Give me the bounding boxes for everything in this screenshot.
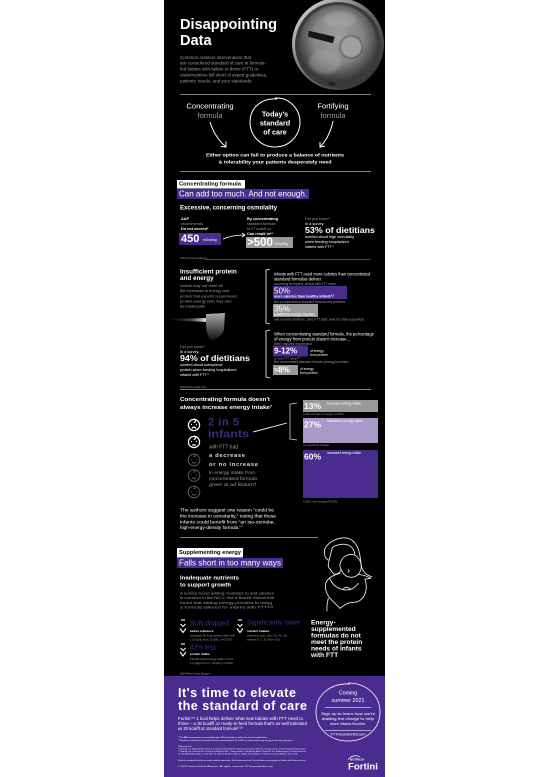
authors note: high-energy-density formula.": [180, 525, 241, 530]
bar: 27%: [303, 418, 378, 447]
panel: protein: 6,7: [298, 356, 302, 360]
callout: coming summer 2021: summer 2021: [332, 698, 364, 704]
callout: today's standard of care: Today's: [262, 110, 288, 118]
footnotes: 10. Van Waardenburg DA, et al. Clin Nutr. 11. Clarke S. Arch Dis Child. 12. Daly A, et al. Nutrients. 13. Nutricia survey of dietitians, data on file.: [178, 752, 298, 756]
panel: calories: [273, 272, 371, 322]
body text: A survey found adding modulars to add calories: [180, 590, 274, 596]
stat: AAP 450: Do not exceed*: [181, 227, 209, 231]
panel: calories: and no extra nutrients. (See FTT stats, which is data-supported): [274, 318, 364, 322]
panel: calories: According to experts, infants with FTT need: [274, 282, 336, 286]
arrow: 450 to 500: [223, 233, 245, 239]
bar: 13%: Increased energy intake: [327, 402, 361, 406]
title: Disappointing: [180, 17, 277, 33]
stat: 2 in 5 infants: given at ad libitum†: [209, 482, 258, 487]
body copy: 9,10: [237, 726, 243, 730]
stat: significantly lower: nutrient intakes: [247, 629, 270, 633]
callout: today's standard of care: standard: [260, 118, 290, 128]
stat: 53% of dietitians: [305, 217, 376, 249]
key message: [206, 153, 344, 165]
option: concentrating formula: formula: [197, 111, 223, 120]
connector line: [253, 423, 287, 432]
bracket: protein: [266, 330, 270, 378]
body text: protein-energy ratio may also: [180, 298, 233, 304]
stat: 94% of dietitians: protein when feeding hospitalized: [180, 368, 236, 372]
icon: face 4: [188, 470, 200, 481]
callout: energy-supplemented formulas: Energy-: [311, 620, 336, 626]
intro text: patients' needs, and your standards:: [180, 78, 252, 84]
stat: concentrating 500: >500: [247, 237, 273, 249]
panel: protein: ≈8%: [274, 366, 290, 374]
heading: energy intake: always increase energy intake: [180, 405, 264, 411]
option: fortifying formula: formula: [320, 111, 346, 120]
stat: 2 in 5 infants: [208, 416, 259, 487]
section heading: can add too much: Can add too much. And not enough.: [179, 190, 307, 198]
stat: 53% of dietitians: when feeding hospitalized: [305, 240, 349, 244]
icon: chevrons 2: [237, 620, 243, 632]
icon: face 5: [188, 486, 200, 498]
panel: protein: of energy: [300, 367, 314, 371]
bracket: decrease group: [290, 403, 297, 440]
panel: protein: But concentrated standard formula (energy) provides: [274, 360, 349, 364]
stat: 2 in 5 infants: concentrated formula: [209, 476, 258, 481]
stat: 42% less: [190, 644, 234, 665]
stat: 53% of dietitians: In a survey,: [305, 222, 324, 226]
callout: energy-supplemented formulas: needs of infants: [311, 646, 362, 652]
icon: infant faces: [188, 419, 200, 498]
reference note: AAP=American Academy: [180, 257, 208, 260]
footnotes: References:: [178, 746, 193, 748]
intro text: are considered standard of care in formula-: [180, 60, 267, 66]
heading: inadequate nutrients: [180, 576, 239, 588]
footnotes: © 2021 Nutricia North America. All rights reserved. FTTmeansfortini.com: [178, 765, 273, 768]
bar: 27%: Maintained energy intake: [327, 419, 363, 423]
panel: call to action: [164, 676, 385, 777]
panel: protein: [273, 332, 375, 375]
footnotes: * The AAP recommends an osmolality below 450 mOsm/kg to reduce the risk of complications.: [178, 736, 268, 739]
stat: concentrating 500: [246, 217, 293, 249]
stat: 42% less: protein intake: [190, 652, 210, 656]
panel: protein: WHO requires recommend: [274, 342, 312, 346]
footnotes: Fortini is a medical food for use under medical supervision. Not for parenteral use. For the dietary management of infants with failure to thrive.: [178, 759, 306, 762]
bar: 13%: [303, 400, 378, 416]
body text: a formula tailored for infants with FTT: [180, 604, 246, 610]
callout: energy-supplemented formulas: [310, 620, 362, 659]
callout: today's standard of care: [250, 98, 300, 147]
panel: calories: Infants with FTT need more calories than concentrated: [274, 272, 371, 276]
option: fortifying formula: Fortifying: [317, 102, 349, 110]
key message: & tolerability your patients desperately need: [218, 159, 332, 165]
key message: Either option can fail to produce a balance of nutrients: [206, 153, 344, 159]
stat: AAP 450: 450: [181, 233, 199, 245]
arrow: fortifying to standard of care: [320, 121, 333, 147]
heading: excessive osmolality: Excessive, concerning osmolality: [180, 204, 278, 212]
image: scoop: [168, 313, 225, 340]
panel: calories: 35%: [274, 304, 290, 314]
illustration: mother and infant: [324, 538, 372, 611]
title: Data: [180, 33, 213, 49]
icon: chevrons 3: [180, 644, 186, 656]
stat: significantly lower: [247, 620, 301, 642]
body text: [180, 590, 274, 610]
body copy: as 20 kcal/fl oz standard formula: [178, 726, 237, 731]
title: [180, 17, 277, 49]
panel: calories: 4,5: [331, 294, 335, 297]
body copy: thrive – a 30 kcal/fl oz ready-to-feed formula that's as well tolerated: [178, 721, 308, 726]
stat: BUN dropped: before reference: [190, 629, 214, 633]
stat: 42% less: (double-blind energy while met for: [190, 657, 234, 661]
logo: Nutricia Fortini: [348, 756, 378, 772]
page background panel: [164, 0, 385, 777]
heading: inadequate nutrients: Inadequate nutrients: [180, 576, 239, 582]
callout: coming summer 2021: FTTmeansfortini.com: [331, 732, 365, 736]
panel: protein: to meet FTT needs: [274, 356, 298, 360]
bar: 60%: 60%: [304, 452, 321, 462]
panel: protein: 9-12%: [274, 346, 297, 356]
footnotes: 5. Clarke SE, et al. J Hum Nutr Diet. 6. Evans S, et al. Arch Dis Child. 7. Pereira-da-Silva L, et al. Ann Nutr Metab. 8. Fenton TR, et al. Nutrition Reviews. 9. Nutricia data on file.: [178, 750, 306, 753]
callout: coming summer 2021: more infants flourish.: [330, 721, 366, 726]
option: fortifying formula: [317, 102, 349, 120]
stat: AAP 450: recommends: [181, 222, 203, 226]
callout: coming summer 2021: [316, 683, 380, 741]
stat: concentrating 500: By concentrating: [247, 217, 279, 221]
heading: insufficient protein: and energy: [180, 275, 214, 282]
icon: face 3: [188, 454, 200, 466]
heading: inadequate nutrients: to support growth: [180, 582, 231, 588]
stat: 42% less: 1.4 g/kg/d vs 2.7 g/kg/d, p<0.001): [190, 661, 233, 665]
body text: found that adding energy provides to using: [180, 600, 272, 605]
stat: significantly lower: (vitamins, iron, zinc, Ca, Fe, Zn,: [247, 634, 288, 638]
heading: elevate standard of care: the standard of care: [178, 699, 307, 713]
callout: coming summer 2021: Coming: [339, 690, 357, 696]
option: concentrating formula: Concentrating: [186, 102, 234, 110]
stat: significantly lower: Significantly lower: [247, 620, 301, 626]
body text: Infants may not meet all: [180, 283, 223, 288]
icon: face 2: [188, 436, 200, 448]
body text: is common in the NICU. But a Barrett clinical trial: [180, 595, 274, 600]
reference note: WHO=World Health Org: [180, 386, 206, 389]
stat: concentrating 500: standard formula: [247, 222, 276, 226]
arrow: concentrating to standard of care: [210, 122, 226, 147]
panel: protein: from protein: [310, 353, 328, 357]
stat: 53% of dietitians: worried about high osmolality: [305, 235, 354, 239]
bar: 60%: (≥20% more energy) (P<0.05): [303, 500, 338, 504]
heading: energy intake: 7: [270, 404, 272, 408]
panel: protein: from protein: [300, 371, 318, 375]
panel: protein: of energy from protein doesn't increase...: [274, 336, 350, 342]
bar: 27%: (no significant change): [303, 443, 329, 447]
stat: 94% of dietitians: infants with FTT^: [180, 373, 209, 377]
stat: significantly lower: vitamin A, C, D; all p<.05): [247, 638, 280, 642]
stat: 2 in 5 infants: with FTT had: [209, 444, 238, 450]
stat: AAP 450: mOsm/kg: [203, 238, 217, 242]
stat: concentrating 500: mOsm/kg: [274, 242, 288, 246]
heading: elevate standard of care: [178, 686, 307, 713]
heading: insufficient protein: [180, 268, 237, 282]
body text: 10: [267, 604, 274, 608]
section tag: supplementing energy: [177, 548, 243, 558]
authors note: [180, 508, 276, 530]
body text: be inadequate: [180, 303, 206, 308]
body text: protein that experts recommend;: [180, 293, 238, 298]
logo: Nutricia Fortini: Fortini: [348, 762, 378, 772]
stat: concentrating 500: to 27 kcal/fl oz: [247, 227, 271, 231]
stat: 94% of dietitians: Did you know?: [180, 345, 205, 349]
stat: 94% of dietitians: worried about suboptimal: [180, 363, 223, 367]
panel: calories: 50%: [274, 286, 290, 296]
stat: AAP 450: [179, 217, 221, 245]
callout: today's standard of care: of care: [263, 128, 287, 136]
heading: insufficient protein: Insufficient protein: [180, 268, 237, 276]
panel: protein: of energy: [310, 349, 324, 353]
stat: 53% of dietitians: Did you know?: [305, 217, 330, 221]
stat: 2 in 5 infants: 2 in 5: [208, 416, 239, 428]
section tag: concentrating formula: [177, 180, 245, 188]
authors note: infants could benefit from "an iso-osmolar,: [180, 520, 275, 524]
image: dial photo: [292, 0, 384, 90]
footnotes: ** Based on calculations of standard formula concentrated to 27 kcal/fl oz; actual values may vary by brand and preparation.: [178, 739, 293, 742]
stat: 53% of dietitians: 53% of dietitians: [305, 226, 376, 235]
stat: BUN dropped: [190, 620, 236, 642]
body text: the increases in energy and: [180, 288, 229, 293]
body text: [180, 283, 238, 308]
callout: coming summer 2021: Sign up to learn how we're: [321, 711, 375, 716]
bracket: calories: [266, 269, 270, 324]
intro text: undernutrition fall short of expert guidelines,: [180, 72, 267, 78]
stat: 42% less: 42% less: [190, 644, 216, 652]
stat: BUN dropped: BUN dropped: [190, 620, 229, 628]
callout: energy-supplemented formulas: formulas do not: [311, 632, 362, 640]
logo: Nutricia Fortini: NUTRICIA: [350, 758, 365, 762]
authors note: The authors suggest one reason "could be: [180, 508, 274, 512]
bar: 13%: 13%: [304, 401, 321, 411]
section tag: concentrating formula: Concentrating formula: [179, 181, 241, 187]
stat: 94% of dietitians: In a survey,: [180, 350, 199, 354]
footnotes: 1. Koletzko B, et al. Pediatric Nutrition in Practice. 2. Joosten KF, Hulst JM. Best Pract Res Clin Gastroenterol. 3. Steele JR, et al. Nutr Clin Pract. 4. Shaw V. Clinical Paediatric Dietetics.: [178, 748, 306, 750]
panel: protein: When concentrating standard formula, the percentage: [274, 332, 375, 336]
heading: elevate standard of care: It's time to elevate: [178, 686, 296, 700]
panel: calories: additional energy calories: [274, 312, 315, 316]
intro text: Common nutrition interventions that: [180, 55, 252, 60]
authors note: the increase in osmolarity," noting that these: [180, 514, 276, 518]
section tag: supplementing energy: Supplementing energy: [179, 550, 241, 556]
heading: energy intake: [180, 397, 272, 411]
stat: AAP 450: AAP: [181, 217, 189, 221]
heading: energy intake: Concentrating formula doesn't: [180, 397, 270, 403]
stat: 2 in 5 infants: in energy intake from: [209, 470, 255, 475]
callout: energy-supplemented formulas: with FTT: [310, 652, 338, 659]
body copy: Fortini™ 1 kcal helps deliver what new babies with FTT need to: [178, 716, 304, 721]
intro text: fed babies with failure to thrive (FTT) or: [180, 66, 259, 72]
callout: coming summer 2021: leading the charge to help: [322, 716, 374, 721]
option: concentrating formula: [186, 102, 234, 120]
bar: 60%: Increased energy intake: [327, 451, 361, 455]
reference note: BUN=Blood Urea Nitrogen: [180, 672, 211, 676]
icon: chevrons 1: [180, 620, 186, 632]
bar: 60%: [303, 450, 378, 504]
stat: 2 in 5 infants: a decrease: [209, 453, 246, 459]
body copy: [178, 716, 308, 731]
footnotes: [178, 736, 306, 768]
callout: energy-supplemented formulas: supplemented: [311, 626, 356, 633]
intro text: [180, 55, 267, 84]
panel: calories: But a concentrated standard formula only provides: [274, 300, 346, 304]
authors note: 7: [241, 524, 243, 528]
panel: calories: standard formulas deliver.: [274, 276, 322, 282]
stat: 53% of dietitians: infants with FTT^: [305, 245, 334, 249]
stat: BUN dropped: (standard 30 kcal nutrient after with: [190, 634, 236, 638]
stat: 94% of dietitians: [180, 345, 251, 377]
stat: 94% of dietitians: 94% of dietitians: [180, 354, 251, 363]
stat: BUN dropped: 1.50 g/dL and 1.5 g/dL, p=0.007): [190, 638, 232, 642]
section heading: falls short: Falls short in too many ways: [179, 558, 281, 568]
stat: 2 in 5 infants: infants: [208, 428, 249, 440]
icon: face 1: [188, 419, 200, 431]
bar: 13%: (≥10% increase in energy) (n=XXX): [303, 412, 344, 416]
stat: 2 in 5 infants: or no increase: [209, 462, 259, 468]
panel: calories: more calories than healthy infants: [274, 294, 331, 298]
bar: 27%: 27%: [304, 420, 321, 430]
stat: concentrating 500: Can result in**: [247, 232, 273, 236]
callout: energy-supplemented formulas: meet the protein: [311, 639, 362, 646]
